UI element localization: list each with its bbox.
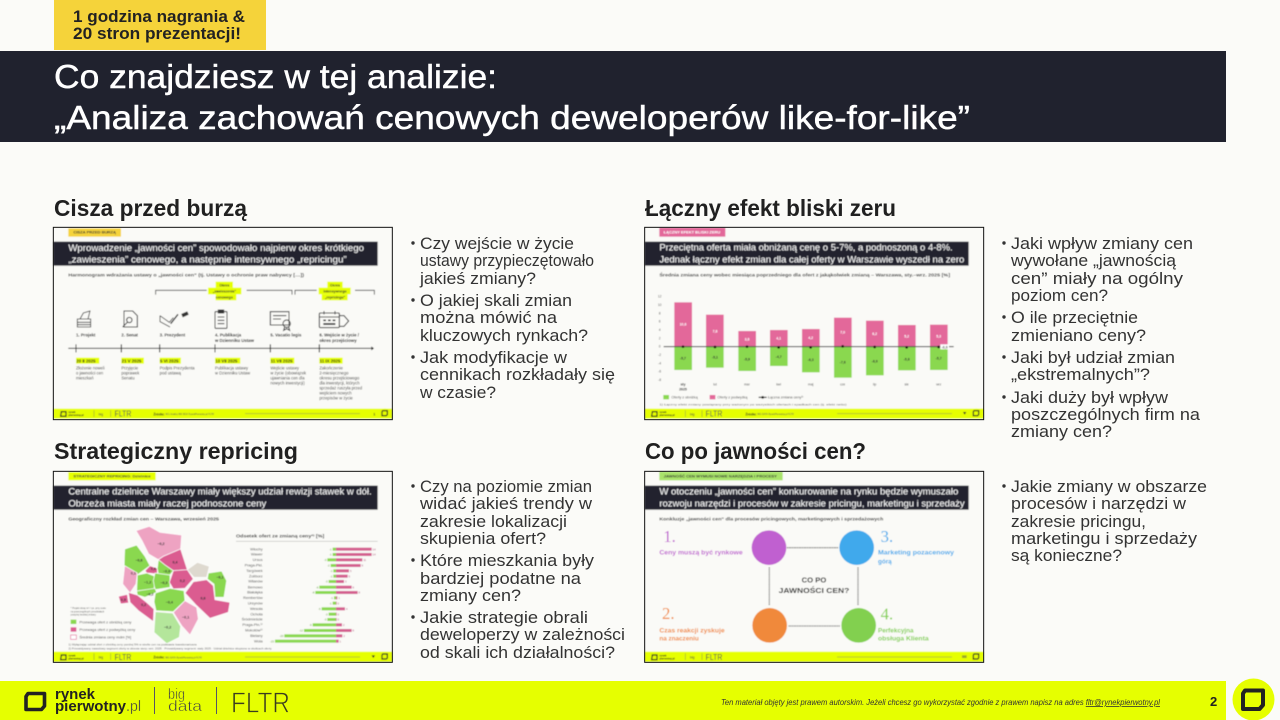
- bullet list: Łączny efekt: „ekstremalnych”?: [1011, 365, 1150, 384]
- slide thumbnail: timeline: okresu przejściowego: [319, 376, 360, 381]
- slide thumbnail: bar chart: Przeciętna oferta miała obniżaną cenę o 5-7%, a podnoszoną o 4-8%.: [659, 243, 953, 253]
- slide thumbnail: map of Warsaw: Centralne dzielnice Warszawy miały większy udział rewizji stawek w dół.: [68, 487, 372, 497]
- slide thumbnail: timeline: nowych inwestycji): [270, 381, 305, 386]
- slide thumbnail: map of Warsaw: −0,2: [164, 625, 171, 629]
- bullet list: Łączny efekt: zmiany cen?: [1011, 422, 1112, 441]
- heading: Strategiczny repricing: Strategiczny repricing: [54, 438, 298, 464]
- slide thumbnail: map of Warsaw: −1,2: [144, 581, 151, 585]
- heading: Co po jawności cen?: Co po jawności cen?: [645, 438, 866, 464]
- slide thumbnail: conclusions diagram: CO PO: [802, 576, 826, 585]
- slide thumbnail: bar chart: Jednak łączny efekt zmian dla całej oferty w Warszawie wyszedł na zero: [659, 255, 964, 265]
- bullet list: Cisza przed burzą: jakieś zmiany?: [419, 269, 536, 288]
- slide thumbnail: map of Warsaw: -3: [324, 558, 327, 562]
- slide thumbnail: map of Warsaw: 2: [343, 634, 345, 638]
- slide thumbnail: bar chart: 1) Łączny efekt zmiany powiązany przy ważonym po wszystkich ofertach i spadkach cen (tj. efekt netto): [659, 402, 847, 406]
- slide thumbnail: bar chart: -5,8: [904, 357, 910, 361]
- slide thumbnail: bar chart: -6: [658, 370, 661, 374]
- bullet list: Co po jawności cen: Jakie zmiany w obszarze: [1011, 477, 1207, 496]
- slide thumbnail: map of Warsaw: Targówek: [246, 569, 263, 573]
- slide thumbnail: map of Warsaw: −0,2: [157, 542, 165, 546]
- slide thumbnail: bar chart: 5,3: [936, 334, 941, 338]
- slide thumbnail: map of Warsaw: -1: [331, 596, 334, 600]
- slide thumbnail: map of Warsaw: 5: [350, 569, 352, 573]
- slide thumbnail: map of Warsaw: BIG DATA RynekPierwotny.pl FLTR: [165, 656, 202, 659]
- slide thumbnail: bar chart: 0: [659, 345, 661, 349]
- bullet list: Łączny efekt: poszczególnych firm na: [1011, 405, 1201, 424]
- bullet list: Strategiczny repricing: widać jakieś trendy w: [419, 494, 593, 513]
- slide thumbnail: map of Warsaw: 6: [353, 629, 355, 633]
- slide thumbnail: conclusions diagram: Marketing pozacenowy: [878, 550, 955, 557]
- slide thumbnail: map of Warsaw: Odsetek ofert ze zmianą ceny²⁾ [%]: [236, 533, 325, 538]
- slide thumbnail: conclusions diagram: rynek: [659, 653, 667, 657]
- slide thumbnail: conclusions diagram: Perfekcyjna: [878, 627, 914, 634]
- bullet list: Cisza przed burzą: Czy wejście w życie: [420, 234, 574, 253]
- slide thumbnail: map of Warsaw: Białołęka: [247, 591, 264, 595]
- slide thumbnail: map of Warsaw: powyżej średniej zmiany: [71, 614, 97, 617]
- slide thumbnail: conclusions diagram: [645, 471, 984, 662]
- slide thumbnail: conclusions diagram: W otoczeniu „jawności cen” konkurowanie na rynku będzie wymuszało: [659, 487, 958, 497]
- slide thumbnail: timeline: Publikacja ustawy: [215, 366, 249, 371]
- slide thumbnail: conclusions diagram: 2.: [662, 604, 674, 623]
- slide thumbnail: map of Warsaw: 9: [362, 564, 364, 568]
- slide thumbnail: conclusions diagram: rozwoju narzędzi i procesów w zakresie pricingu, marketingu i sprzedaży: [659, 499, 965, 509]
- slide thumbnail: timeline: 1. Projekt: [76, 332, 96, 337]
- logo: FLTR: FLTR: [231, 688, 290, 720]
- slide thumbnail: map of Warsaw: 0,6: [151, 567, 156, 571]
- slide thumbnail: map of Warsaw: 0,4: [172, 561, 179, 565]
- slide thumbnail: conclusions diagram: na znaczeniu: [659, 636, 699, 643]
- slide thumbnail: map of Warsaw: pierwotny.pl: [68, 656, 84, 660]
- slide thumbnail: bar chart: Oferty z obniżką: [671, 396, 699, 400]
- bullet list: Cisza przed burzą: O jakiej skali zmian: [420, 291, 572, 310]
- slide thumbnail: map of Warsaw: Ochota: [250, 612, 264, 616]
- bullet list: Cisza przed burzą: ustawy przypieczętowało: [420, 251, 594, 270]
- slide thumbnail: bar chart: pierwotny.pl: [659, 413, 675, 417]
- slide thumbnail: timeline: w życie (obowiązek: [270, 371, 307, 376]
- slide thumbnail: map of Warsaw: -1: [329, 553, 332, 557]
- slide thumbnail: map of Warsaw: Ursynów: [248, 601, 263, 605]
- slide thumbnail: bar chart: 10: [658, 303, 662, 307]
- slide thumbnail: bar chart: -8: [658, 378, 661, 382]
- slide thumbnail: bar chart: 5,2: [904, 335, 909, 339]
- bullet list: Co po jawności cen: procesów i narzędzi w: [1011, 494, 1187, 513]
- slide thumbnail: map of Warsaw: na poszczególnych przedziałach: [71, 610, 105, 613]
- badge: 1 godzina nagrania: 1 godzina nagrania &: [73, 7, 245, 26]
- slide thumbnail: bar chart: 8: [659, 311, 661, 315]
- slide thumbnail: bar chart: sie: [905, 382, 909, 386]
- slide thumbnail: conclusions diagram: obsługa Klienta: [878, 636, 929, 643]
- slide thumbnail: bar chart: [645, 227, 984, 420]
- slide thumbnail: timeline: Harmonogram wdrażania ustawy o „jawności cen” (tj. Ustawy o ochronie praw nabywcy […]): [68, 273, 305, 278]
- slide thumbnail: timeline: dla inwestycji, których: [319, 381, 360, 386]
- slide thumbnail: map of Warsaw: -3: [325, 612, 328, 616]
- copyright note: Ten materiał objęty jest prawem autorskim. Jeżeli chcesz go wykorzystać zgodnie z prawem napisz na adres fltr@rynekpierwotny.pl: [721, 698, 1160, 707]
- slide thumbnail: timeline: 1: [373, 412, 375, 416]
- slide thumbnail: timeline: Podpis Prezydenta: [160, 366, 195, 371]
- slide thumbnail: map of Warsaw: -9: [309, 623, 312, 627]
- slide thumbnail: timeline: „zawieszenia” cenowego, a następnie intensywnego „repricingu”: [68, 255, 347, 265]
- slide thumbnail: map of Warsaw: 1) Wyłączając udział ofert z obniżką ceny poniżej 5% w strefie cen na podstawie kwestionariusza: [68, 644, 198, 647]
- bullet list: Strategiczny repricing: skupienia ofert?: [420, 529, 546, 548]
- slide thumbnail: bar chart: 2025: [679, 388, 687, 392]
- slide thumbnail: conclusions diagram: JAWNOŚĆ CEN WYMUSI NOWE NARZĘDZIA I PROCESY: [664, 473, 778, 478]
- slide thumbnail: map of Warsaw: Średnia zmiana ceny mdm [%]: [79, 635, 131, 640]
- logo text: rynek: [55, 686, 96, 703]
- slide thumbnail: bar chart: kwi: [776, 382, 781, 386]
- slide thumbnail: map of Warsaw: big: [99, 655, 103, 659]
- slide thumbnail: timeline: [53, 227, 392, 420]
- slide thumbnail: map of Warsaw: Wilanów: [248, 580, 263, 584]
- slide thumbnail: map of Warsaw: −0,1: [182, 616, 189, 620]
- title band: Co znajdziesz w tej analizie:: [54, 58, 497, 95]
- slide thumbnail: map of Warsaw: Geograficzny rozkład zmian cen – Warszawa, wrzesień 2025: [68, 516, 220, 521]
- slide thumbnail: bar chart: cze: [840, 382, 845, 386]
- slide thumbnail: map of Warsaw: 6: [353, 585, 355, 589]
- slide thumbnail: timeline: o jawności cen: [76, 371, 104, 376]
- slide thumbnail: map of Warsaw: -12: [299, 629, 304, 633]
- slide thumbnail: bar chart: -5,9: [744, 357, 750, 361]
- slide thumbnail: map of Warsaw: 2: [343, 623, 345, 627]
- slide thumbnail: timeline: w Dzienniku Ustaw: [215, 371, 251, 376]
- slide thumbnail: timeline: w Dzienniku Ustaw: [214, 338, 255, 343]
- slide thumbnail: bar chart: 6,2: [872, 332, 877, 336]
- slide thumbnail: bar chart: -2: [658, 353, 661, 357]
- bullet list: Łączny efekt: [1002, 234, 1201, 441]
- logo text: .pl: [126, 698, 141, 715]
- slide thumbnail: bar chart: -7,6: [840, 361, 846, 365]
- bullet list: Strategiczny repricing: zakresie lokalizacji: [420, 512, 567, 531]
- slide thumbnail: bar chart: Źródło:: [745, 411, 757, 416]
- slide thumbnail: timeline: 21 V 2025: [122, 358, 142, 363]
- bullet list: Strategiczny repricing: od skali ich działalności?: [420, 643, 615, 662]
- slide thumbnail: bar chart: 6: [659, 320, 661, 324]
- bullet list: Co po jawności cen: są konieczne?: [1011, 546, 1122, 565]
- slide thumbnail: timeline: Zakończenie: [319, 366, 344, 371]
- slide thumbnail: conclusions diagram: 1.: [663, 527, 676, 546]
- slide thumbnail: conclusions diagram: 3.: [881, 527, 893, 546]
- slide thumbnail: timeline: cenowego: [216, 295, 233, 299]
- slide thumbnail: map of Warsaw: FLTR: [115, 653, 132, 662]
- slide thumbnail: timeline: ujawniania cen dla: [270, 376, 305, 381]
- heading: Łączny efekt bliski zeru: Łączny efekt bliski zeru: [645, 195, 896, 221]
- slide thumbnail: timeline: intensywnego: [323, 289, 347, 293]
- slide thumbnail: timeline: 2-miesięcznego: [319, 371, 349, 376]
- slide thumbnail: map of Warsaw: Praga-Płd.: [245, 564, 263, 568]
- slide thumbnail: timeline: pierwotny.pl: [68, 413, 84, 417]
- bullet list: Łączny efekt: O ile przeciętnie: [1011, 308, 1138, 327]
- slide thumbnail: bar chart: -5,7: [936, 357, 942, 361]
- slide thumbnail: map of Warsaw: −0,6: [135, 558, 143, 562]
- slide thumbnail: bar chart: Oferty z podwyżką: [717, 396, 748, 400]
- slide thumbnail: bar chart: 4,2: [808, 336, 813, 340]
- slide thumbnail: map of Warsaw: Przewaga ofert z podwyżką ceny: [79, 628, 135, 632]
- bullet list: Strategiczny repricing: Czy na poziomie zmian: [420, 477, 592, 496]
- slide thumbnail: map of Warsaw: 14: [373, 547, 376, 551]
- slide thumbnail: map of Warsaw: -1: [329, 601, 332, 605]
- slide thumbnail: map of Warsaw: 4: [346, 607, 348, 611]
- slide thumbnail: conclusions diagram: JAWNOŚCI CEN?: [779, 586, 850, 595]
- slide thumbnail: conclusions diagram: FLTR: [706, 653, 723, 662]
- slide thumbnail: conclusions diagram: Konkluzje „jawności cen” dla procesów pricingowych, marketingowych i sprzedażowych: [659, 516, 884, 521]
- slide thumbnail: timeline: Przyjęcie: [121, 366, 139, 371]
- bullet list: Cisza przed burzą: w czasie?: [419, 383, 496, 402]
- slide thumbnail: bar chart: mar: [744, 382, 751, 386]
- bullet list: Łączny efekt: Jaki wpływ zmiany cen: [1011, 234, 1193, 253]
- slide thumbnail: map of Warsaw: Wawer: [251, 553, 263, 557]
- slide thumbnail: bar chart: big: [690, 412, 695, 416]
- slide thumbnail: map of Warsaw: -20: [279, 634, 284, 638]
- bullet list: Łączny efekt: Jaki duży był wpływ: [1011, 388, 1169, 407]
- logo: big data: big: [168, 686, 185, 703]
- slide thumbnail: timeline: FLTR: [115, 410, 132, 419]
- slide thumbnail: map of Warsaw: STRATEGICZNY REPRICING: Dzielnice: [73, 474, 151, 478]
- slide thumbnail: map of Warsaw: -1: [329, 547, 332, 551]
- icon: rynekpierwotny logo: [26, 694, 44, 710]
- slide thumbnail: timeline: Złożenie noweli: [76, 366, 105, 371]
- slide thumbnail: timeline: 11 VII 2025: [271, 358, 293, 363]
- slide thumbnail: timeline: „repricingu”: [325, 295, 346, 299]
- slide thumbnail: bar chart: Łączna zmiana ceny¹⁾: [768, 396, 804, 400]
- bullet list: Cisza przed burzą: można mówić na: [420, 308, 558, 327]
- slide thumbnail: map of Warsaw: 14: [373, 553, 376, 557]
- slide thumbnail: timeline: 5 VI 2025: [160, 358, 179, 363]
- bullet list: Łączny efekt: Jaki był udział zmian: [1011, 348, 1175, 367]
- slide thumbnail: bar chart: -5,1: [712, 355, 718, 359]
- slide thumbnail: conclusions diagram: Ceny muszą być rynkowe: [659, 550, 743, 557]
- slide thumbnail: bar chart: -4: [658, 361, 661, 365]
- slide thumbnail: timeline: 10 VII 2025: [215, 358, 238, 363]
- slide thumbnail: timeline: 2. Senat: [121, 332, 138, 337]
- slide thumbnail: bar chart: 7,8: [713, 329, 717, 333]
- slide thumbnail: timeline: Wejście ustawy: [270, 366, 300, 371]
- slide thumbnail: map of Warsaw: 11: [363, 558, 367, 562]
- slide thumbnail: map of Warsaw: Przewaga ofert z obniżką ceny: [79, 620, 132, 624]
- slide thumbnail: conclusions diagram: 4.: [881, 604, 893, 623]
- bullet list: Strategiczny repricing: deweloperzy w zależności: [420, 625, 625, 644]
- slide thumbnail: timeline: okres przejściowy: [319, 338, 357, 343]
- slide thumbnail: bar chart: 4: [659, 328, 661, 332]
- logo badge: [1232, 678, 1274, 720]
- slide thumbnail: map of Warsaw: 0,1: [131, 571, 136, 575]
- slide thumbnail: map of Warsaw: Bielany: [250, 634, 263, 638]
- slide thumbnail: map of Warsaw: −0,4: [166, 600, 174, 604]
- bullet list: Strategiczny repricing: [411, 477, 625, 662]
- slide thumbnail: map of Warsaw: −0,1: [216, 575, 224, 579]
- slide thumbnail: bar chart: -4,7: [776, 355, 782, 359]
- bullet list: Strategiczny repricing: zmiany cen?: [420, 586, 521, 605]
- slide thumbnail: map of Warsaw: 2) Przewidywany zawodowy segment oferty w okresie sierp.-wrz. 2025 · Przewidywany segment: stały 2025 · Udział dzielnice skupione w okolicach oferty: [68, 647, 273, 650]
- bullet list: Łączny efekt: zmieniano ceny?: [1011, 326, 1146, 345]
- slide thumbnail: map of Warsaw: 0,9: [121, 598, 126, 602]
- logo text: pierwotny: [55, 698, 127, 715]
- slide thumbnail: timeline: 4. Publikacja: [215, 332, 242, 337]
- bullet list: Łączny efekt: wywołane „jawnością: [1010, 251, 1177, 270]
- slide thumbnail: bar chart: lut: [713, 382, 717, 386]
- slide thumbnail: bar chart: 7,0: [840, 331, 845, 335]
- bullet list: Co po jawności cen: [1002, 477, 1207, 565]
- slide thumbnail: map of Warsaw: * Projekt skray m² / rys. przy cenie: [71, 607, 107, 610]
- slide thumbnail: map of Warsaw: −0,3: [160, 581, 168, 585]
- slide thumbnail: map of Warsaw: 3: [345, 580, 347, 584]
- slide thumbnail: map of Warsaw: -1: [330, 569, 333, 573]
- slide thumbnail: bar chart: maj: [808, 382, 814, 386]
- slide thumbnail: map of Warsaw: 5: [349, 574, 351, 578]
- slide thumbnail: bar chart: 4,1: [776, 337, 781, 341]
- slide thumbnail: map of Warsaw: Ursus: [253, 558, 263, 562]
- slide thumbnail: map of Warsaw: Śródmieście: [242, 617, 263, 622]
- slide thumbnail: map of Warsaw: Rembertów: [243, 596, 263, 600]
- slide thumbnail: map of Warsaw: 8: [359, 591, 361, 595]
- slide thumbnail: bar chart: wrz: [936, 382, 942, 386]
- title band: [0, 51, 1226, 142]
- slide thumbnail: map of Warsaw: 0,6: [200, 596, 206, 600]
- slide thumbnail: timeline: NCL Analizy BIK BGK RynekPierwotny.pl FLTR: [165, 413, 214, 416]
- slide thumbnail: map of Warsaw: −0,2: [146, 592, 154, 596]
- slide thumbnail: timeline: 6. Wejście w życie /: [319, 332, 360, 337]
- slide thumbnail: map of Warsaw: Wesoła: [250, 607, 264, 611]
- slide thumbnail: timeline: 11 IX 2025: [320, 358, 341, 363]
- slide thumbnail: conclusions diagram: big: [690, 655, 695, 659]
- slide thumbnail: timeline: 5. Vacatio legis: [270, 332, 302, 337]
- slide thumbnail: map of Warsaw: -5: [318, 607, 321, 611]
- slide thumbnail: bar chart: ŁĄCZNY EFEKT BLISKI ZERU: [664, 231, 721, 235]
- slide thumbnail: timeline: rynek: [68, 410, 76, 414]
- bullet list: Cisza przed burzą: cennikach rozkładały się: [420, 365, 615, 384]
- slide thumbnail: map of Warsaw: -8: [312, 591, 315, 595]
- slide thumbnail: map of Warsaw: -1: [330, 574, 333, 578]
- slide thumbnail: map of Warsaw: Praga-Płn.¹⁾: [242, 622, 263, 627]
- slide thumbnail: bar chart: BIG DATA RynekPierwotny.pl FLTR: [757, 413, 794, 416]
- slide thumbnail: map of Warsaw: -6: [316, 585, 319, 589]
- slide thumbnail: bar chart: rynek: [659, 410, 667, 414]
- slide thumbnail: conclusions diagram: górą: [878, 559, 892, 566]
- slide thumbnail: bar chart: -0,0: [942, 345, 948, 349]
- slide thumbnail: map of Warsaw: -2: [327, 564, 330, 568]
- logo: big data: data: [168, 698, 203, 715]
- bullet list: Cisza przed burzą: [411, 234, 615, 402]
- slide thumbnail: timeline: „zawieszenia”: [213, 289, 236, 293]
- title band: „Analiza zachowań cenowych deweloperów like-for-like”: [54, 99, 970, 136]
- slide thumbnail: timeline: wejściem nowych: [319, 391, 352, 396]
- slide thumbnail: timeline: Okres: [219, 283, 229, 287]
- slide thumbnail: timeline: Źródło:: [153, 411, 165, 416]
- badge: 1 godzina nagrania: [54, 0, 266, 50]
- slide thumbnail: bar chart: 3,8: [745, 337, 749, 341]
- slide thumbnail: bar chart: 2: [659, 336, 661, 340]
- slide thumbnail: conclusions diagram: Czas reakcji zyskuje: [659, 627, 725, 634]
- bullet list: Cisza przed burzą: kluczowych rynkach?: [420, 326, 588, 345]
- slide thumbnail: map of Warsaw: -3: [325, 580, 328, 584]
- badge: 1 godzina nagrania: 20 stron prezentacji!: [73, 24, 241, 43]
- slide thumbnail: timeline: sprzedaż ruszyła przed: [319, 386, 363, 391]
- bullet list: Cisza przed burzą: Jak modyfikacje w: [420, 348, 568, 367]
- bullet list: Strategiczny repricing: Jakie strategie obrali: [420, 608, 588, 627]
- footer bar: [0, 681, 1226, 720]
- bullet list: Strategiczny repricing: bardziej podatne na: [420, 569, 582, 588]
- slide thumbnail: map of Warsaw: 1: [338, 596, 340, 600]
- slide thumbnail: bar chart: -6,9: [872, 360, 878, 364]
- slide thumbnail: map of Warsaw: rynek: [68, 653, 76, 657]
- slide thumbnail: bar chart: -6,3: [808, 358, 814, 362]
- bullet list: Łączny efekt: cen” miały na ogólny: [1011, 269, 1184, 288]
- logo text: [55, 686, 141, 715]
- slide thumbnail: map of Warsaw: Żoliborz: [249, 573, 263, 578]
- slide thumbnail: map of Warsaw: Bemowo: [248, 585, 263, 589]
- bullet list: Strategiczny repricing: Które mieszkania były: [420, 551, 595, 570]
- bullet list: Co po jawności cen: marketingu i sprzedaży: [1011, 529, 1198, 548]
- slide thumbnail: timeline: Wprowadzenie „jawności cen” spowodowało najpierw okres krótkiego: [68, 243, 364, 253]
- slide thumbnail: bar chart: sty: [680, 382, 686, 386]
- bullet list: Łączny efekt: poziom cen?: [1011, 286, 1108, 305]
- slide thumbnail: timeline: Senatu: [121, 376, 135, 381]
- slide thumbnail: map of Warsaw: Wola: [254, 639, 264, 643]
- slide thumbnail: timeline: mieszkań: [76, 376, 94, 381]
- slide thumbnail: bar chart: Średnia zmiana ceny wobec miesiąca poprzedniego dla ofert z jakąkolwiek zmianą – Warszawa, sty.–wrz. 2025 [%]: [659, 272, 951, 278]
- slide thumbnail: map of Warsaw: -23: [270, 639, 275, 643]
- page number: 2: [1210, 694, 1217, 709]
- slide thumbnail: map of Warsaw: Mokotów¹⁾: [245, 628, 263, 633]
- slide thumbnail: bar chart: lip: [873, 382, 876, 386]
- slide thumbnail: timeline: big: [99, 412, 103, 416]
- slide thumbnail: map of Warsaw: [53, 471, 392, 662]
- slide thumbnail: bar chart: 12: [658, 295, 662, 299]
- slide thumbnail: map of Warsaw: Obrzeża miasta miały raczej podnoszone ceny: [68, 498, 267, 508]
- slide thumbnail: map of Warsaw: Włochy: [250, 547, 263, 551]
- slide thumbnail: bar chart: -5,7: [680, 357, 686, 361]
- slide thumbnail: bar chart: 10,6: [680, 323, 686, 327]
- slide thumbnail: map of Warsaw: −0,6: [163, 570, 170, 574]
- bullet list: Co po jawności cen: zakresie pricingu,: [1011, 512, 1146, 531]
- slide thumbnail: map of Warsaw: -3: [324, 618, 327, 622]
- heading: Cisza przed burzą: Cisza przed burzą: [54, 195, 247, 221]
- slide thumbnail: bar chart: FLTR: [706, 410, 723, 419]
- slide thumbnail: timeline: przepisów w życie: [319, 396, 354, 401]
- slide thumbnail: timeline: CISZA PRZED BURZĄ: [73, 231, 117, 235]
- slide thumbnail: timeline: 3. Prezydent: [160, 332, 186, 337]
- slide thumbnail: map of Warsaw: 0,2: [180, 579, 185, 583]
- slide thumbnail: map of Warsaw: 0: [338, 601, 340, 605]
- slide thumbnail: timeline: Okres: [330, 283, 340, 287]
- logo: big data: [168, 686, 203, 715]
- slide thumbnail: conclusions diagram: pierwotny.pl: [659, 656, 675, 660]
- slide thumbnail: map of Warsaw: 0,2: [141, 603, 146, 607]
- slide thumbnail: timeline: 20 II 2025: [76, 358, 96, 363]
- slide thumbnail: timeline: poprawek: [121, 371, 140, 376]
- slide thumbnail: map of Warsaw: 1: [340, 639, 342, 643]
- slide thumbnail: map of Warsaw: 0: [338, 618, 340, 622]
- slide thumbnail: map of Warsaw: Źródło:: [153, 655, 165, 660]
- slide thumbnail: timeline: pod ustawą: [160, 371, 182, 376]
- slide thumbnail: map of Warsaw: 0: [338, 612, 340, 616]
